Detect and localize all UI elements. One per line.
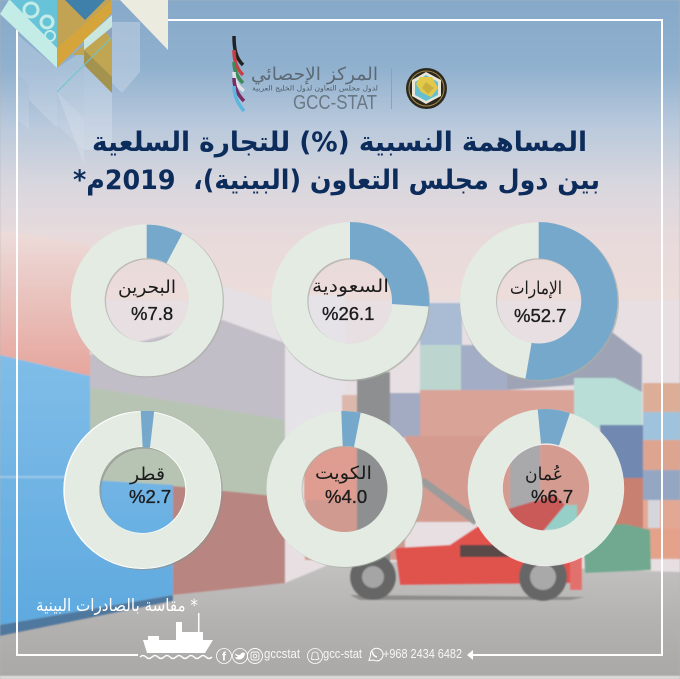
donut: UAE 52.7% — [478, 222, 618, 380]
value: %52.7 — [514, 305, 566, 326]
logo Latin name: GCC-STAT — [293, 92, 377, 114]
far right stacks — [643, 383, 680, 412]
green container right — [583, 524, 651, 573]
red container lower middle — [173, 486, 285, 595]
icon: instagram — [248, 648, 262, 664]
pale wedge above grey container — [222, 285, 285, 345]
light area behind mast — [285, 295, 345, 495]
ground — [0, 560, 680, 679]
blue containers left — [0, 355, 173, 625]
label: الإمارات — [510, 278, 562, 299]
footnote: * مقاسة بالصادرات البينية — [36, 596, 198, 616]
mast — [357, 372, 390, 562]
red container upper left — [0, 230, 90, 376]
title line 1: المساهمة النسبية (%) للتجارة السلعية — [92, 127, 587, 158]
stacks centre right — [420, 303, 462, 346]
title — [73, 127, 600, 196]
teal patterned triangle — [0, 0, 57, 68]
phone number: +968 2434 6482 — [383, 647, 462, 661]
decorative corner ornament — [0, 0, 168, 165]
green container — [90, 387, 285, 500]
handle gccstat: gccstat — [264, 647, 300, 661]
wheels — [350, 554, 396, 600]
handle gcc-stat: gcc-stat — [323, 647, 362, 661]
value: %26.1 — [322, 303, 374, 324]
icon: twitter — [232, 648, 248, 664]
icon: whatsapp — [369, 648, 383, 661]
grey container — [90, 320, 285, 422]
label: البحرين — [118, 277, 176, 298]
icon: GCC emblem — [406, 68, 447, 109]
donut: Bahrain 7.8% — [88, 225, 206, 360]
teal in Oman hole — [532, 505, 577, 530]
label: عُمان — [525, 464, 563, 485]
donut: Oman 6.7% — [485, 409, 607, 549]
donut: Saudi Arabia 26.1% — [289, 222, 429, 363]
value: %2.7 — [129, 486, 171, 507]
icon: facebook — [216, 648, 232, 664]
label: الكويت — [315, 463, 372, 484]
value: %4.0 — [325, 486, 367, 507]
label: السعودية — [312, 276, 389, 297]
forklift boom — [418, 478, 480, 525]
label: قطر — [129, 464, 165, 485]
contact bar — [216, 647, 462, 664]
facebook glyph: f — [222, 650, 227, 664]
cream triangle — [120, 0, 168, 50]
red left of forklift — [305, 495, 405, 560]
logo Arabic name: المركز الإحصائي — [251, 64, 378, 85]
icon: ship on waves — [140, 613, 213, 658]
title line 2: بين دول مجلس التعاون (البينية)، 2019م* — [73, 165, 600, 196]
logo: GCC-STAT — [234, 36, 392, 114]
value: %7.8 — [131, 303, 173, 324]
logo Arabic subtitle: لدول مجلس التعاون لدول الخليج العربية — [252, 84, 378, 92]
value: %6.7 — [531, 486, 573, 507]
forklift body — [395, 525, 580, 585]
donut: Qatar 2.7% — [81, 411, 205, 553]
icon: snapchat — [308, 648, 322, 664]
icon: logo plume — [234, 36, 244, 111]
donut: Kuwait 4.0% — [284, 411, 406, 550]
gold shapes — [57, 0, 112, 48]
